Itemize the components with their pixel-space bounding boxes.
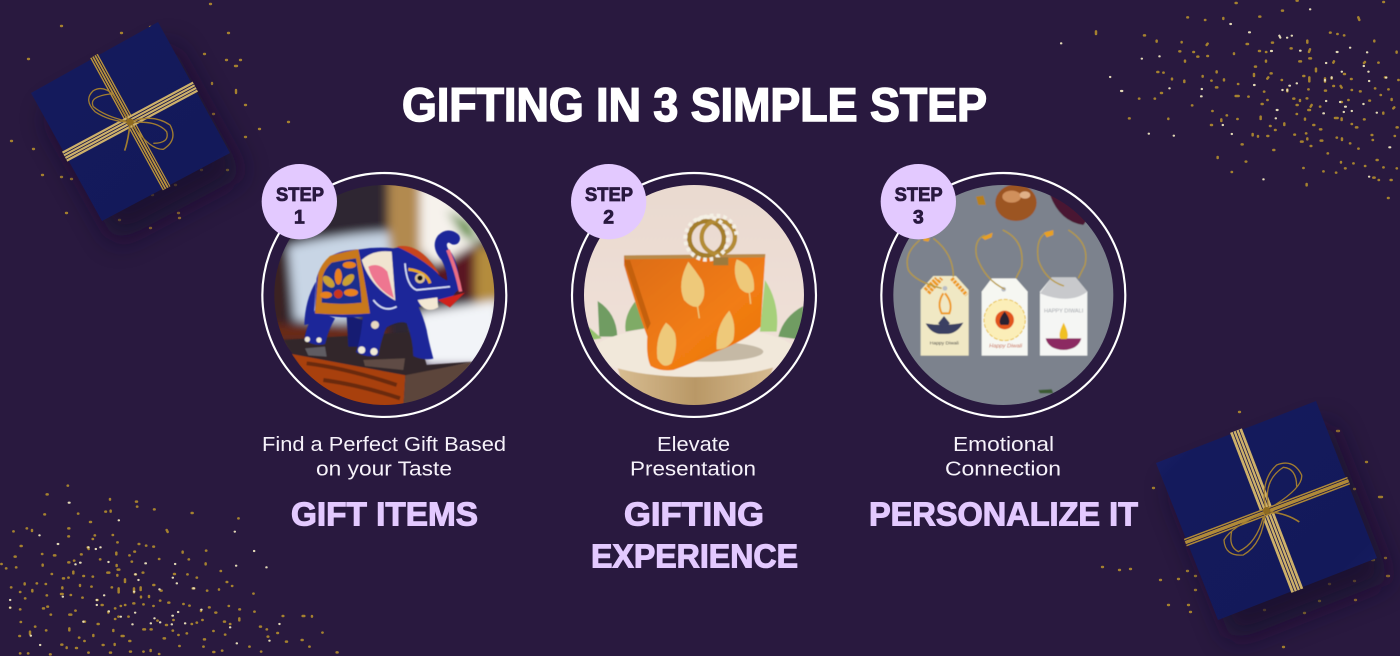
step 3 badge: STEP [895,185,943,206]
confetti: bottom left [1,486,338,654]
step 1 description: on your Taste [316,458,452,480]
gift ribbon and bow [1185,430,1349,592]
gift paper [1156,401,1377,620]
gift box: bottom right [1156,401,1391,642]
step 1 description: Find a Perfect Gift Based [262,434,506,456]
step 2 image: orange bag [571,164,816,417]
bag leaf motifs [657,259,754,366]
step 1 heading: GIFT ITEMS [291,496,478,534]
bag body [624,255,765,370]
gift shadow [1170,423,1391,642]
step 2 card [571,164,816,576]
title: GIFTING IN 3 SIMPLE STEP [402,78,987,131]
step 2 description: Presentation [630,458,756,480]
tag 2 [982,278,1028,356]
step 3 badge [881,164,956,239]
step 3 heading: PERSONALIZE IT [869,496,1139,534]
step 1 description [262,434,506,480]
step 1 card [262,164,510,534]
gift paper [31,22,230,221]
step 3 description: Emotional [953,434,1054,456]
step 2 heading: EXPERIENCE [591,538,798,576]
step 2 badge [571,164,646,239]
step 3 description [945,434,1061,480]
tag strings [907,230,1086,289]
step 2 description: Elevate [657,434,730,456]
step 3 badge: 3 [913,208,924,229]
tag 1 [921,276,969,356]
gift box: top left [31,22,244,243]
step 1 badge: STEP [276,185,324,206]
step 3 image: diwali tags [881,164,1125,417]
confetti: top right [1061,1,1399,198]
step 2 badge: STEP [585,185,633,206]
bag handle with pearls [685,216,737,265]
step 2 heading [591,496,798,576]
step 2 badge: 2 [603,208,614,229]
step 2 description [630,434,756,480]
tag 2: Happy Diwali [989,343,1023,349]
step 3 description: Connection [945,458,1061,480]
step 1 badge: 1 [294,208,305,229]
gift ribbon and bow [63,55,197,189]
tag 3: HAPPY DIWALI [1044,309,1083,315]
tag 1: Happy Diwali [930,340,959,346]
sweet and props [995,184,1037,221]
elephant figure [304,236,465,359]
step 3 card [869,164,1139,534]
step 1 image: elephant [262,164,510,417]
gift shadow [45,44,244,243]
step 2 heading: GIFTING [624,496,764,534]
tag 3 [1040,277,1087,356]
step 1 badge [262,164,337,239]
